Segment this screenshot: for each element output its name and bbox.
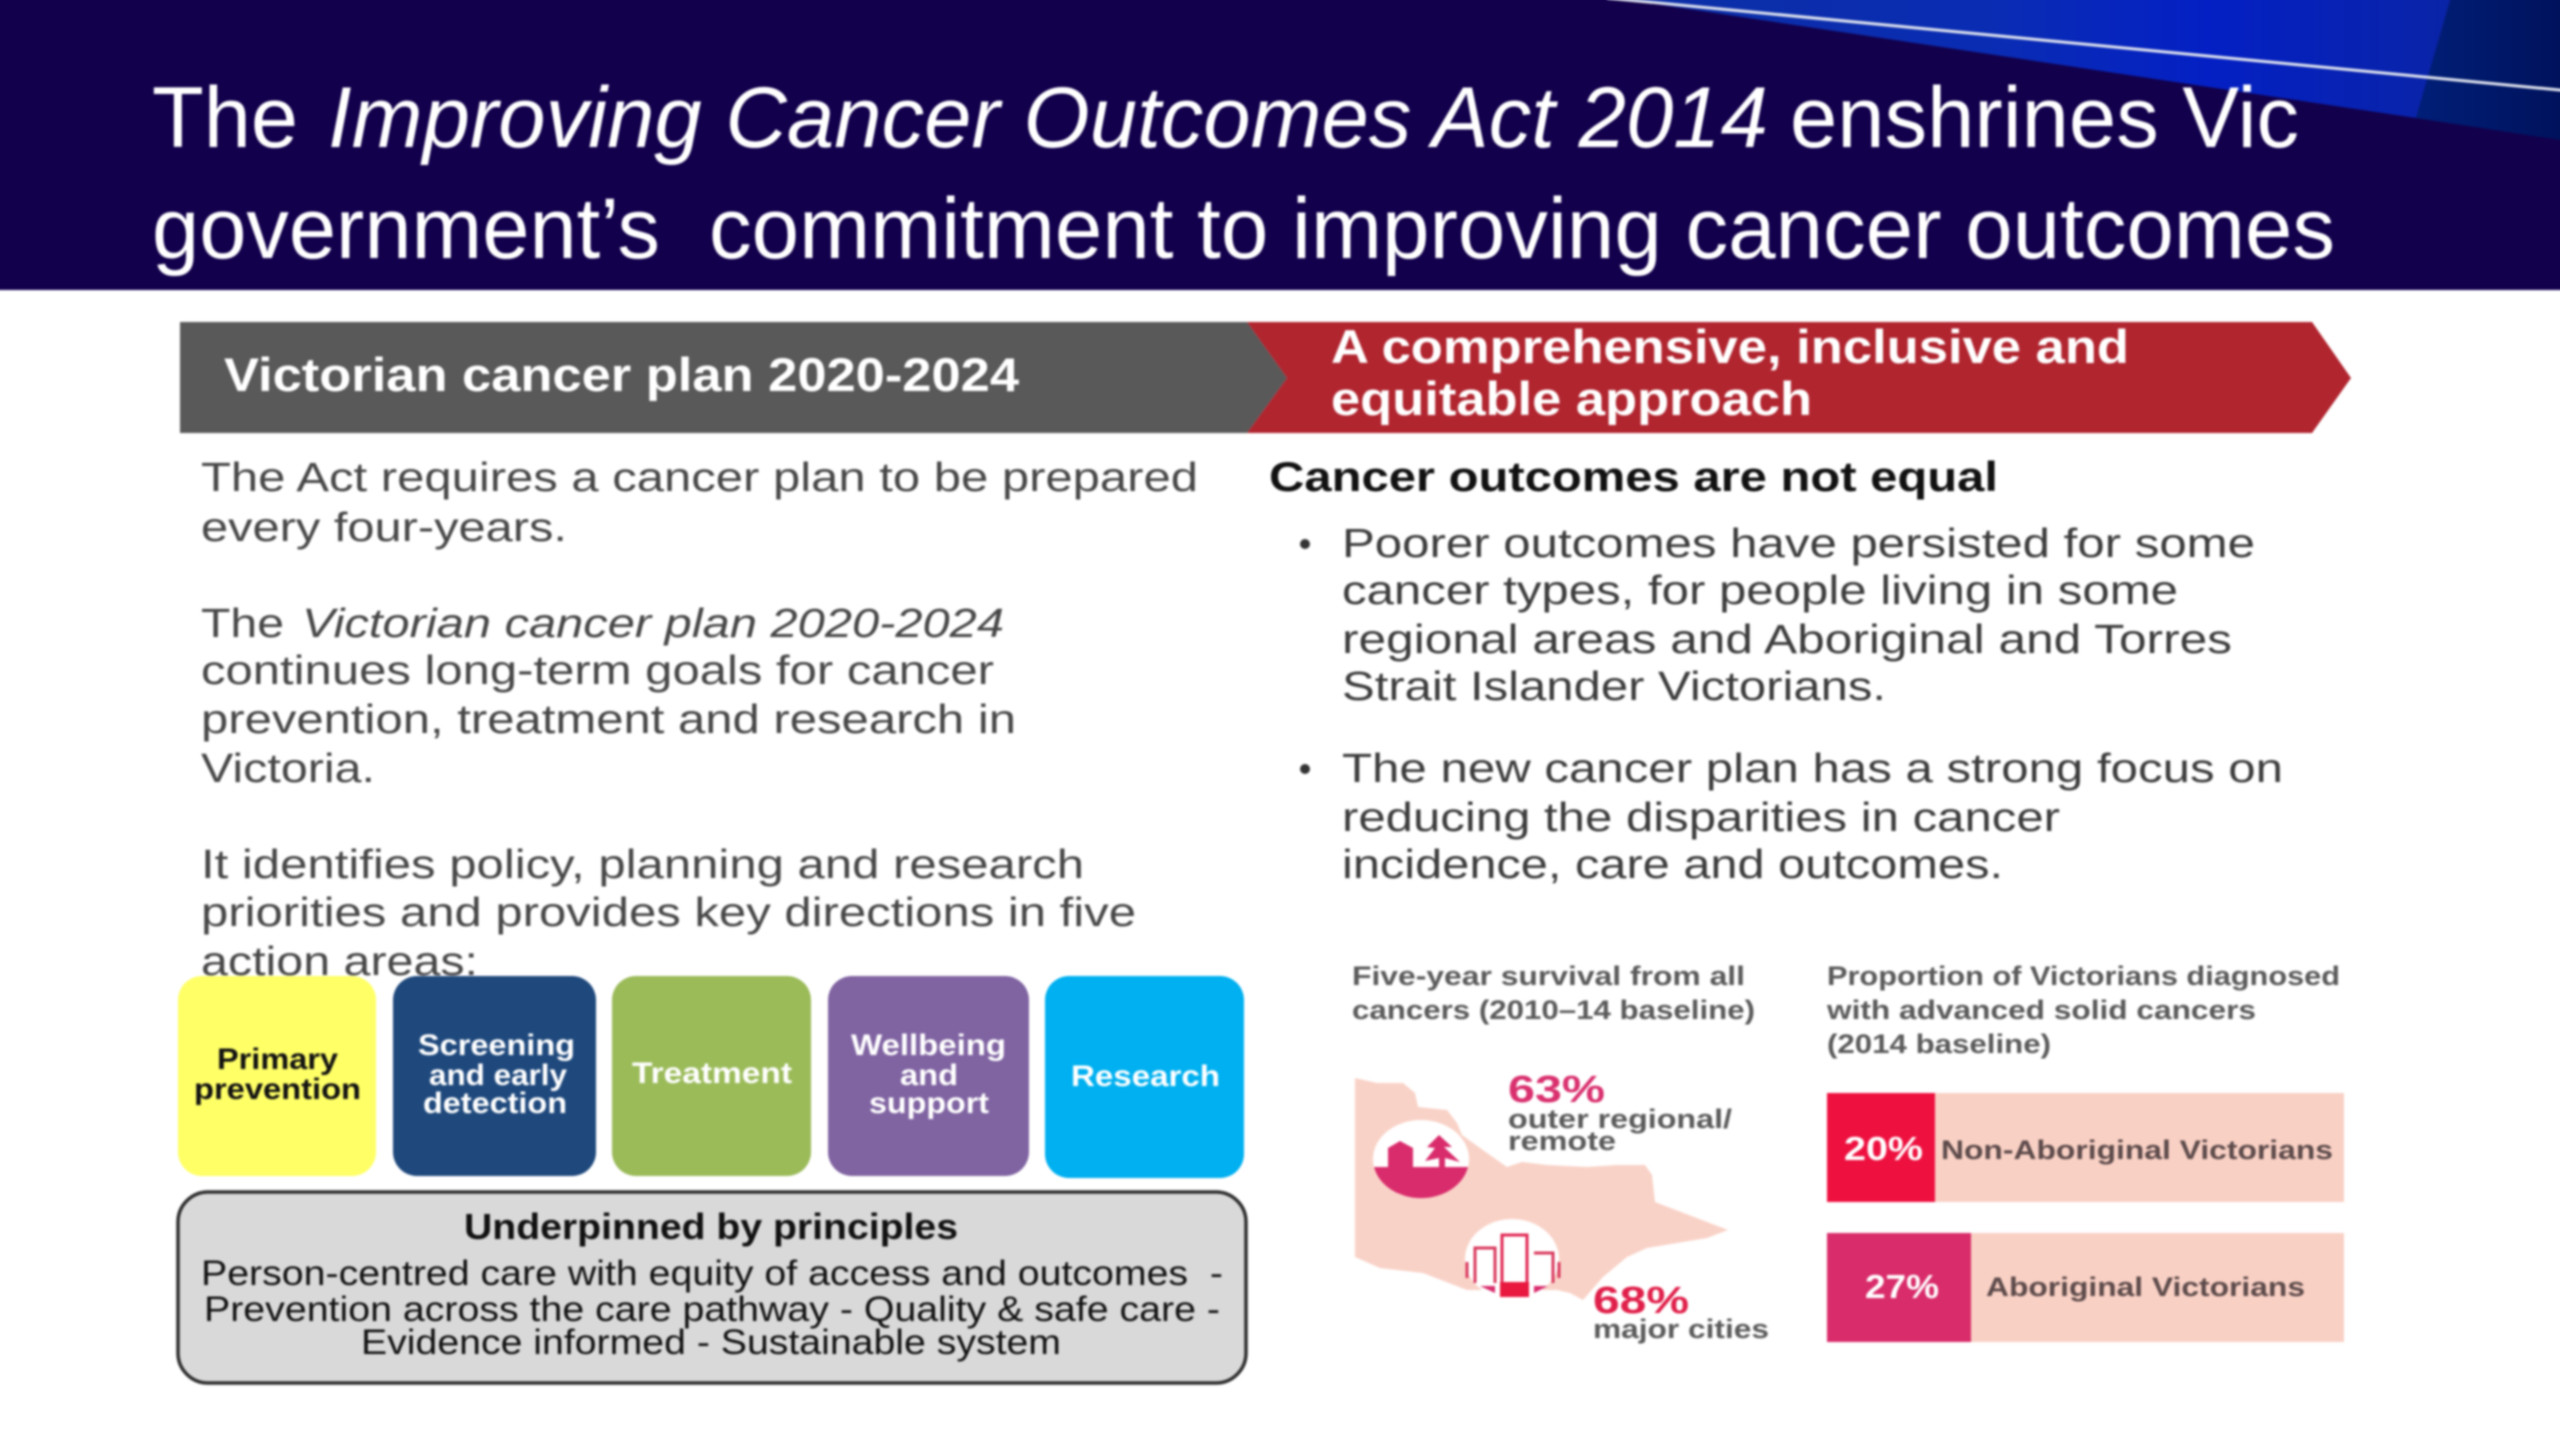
bar: Aboriginal Victorians 27 percent (1827, 1233, 2344, 1342)
principles panel: Evidence informed - Sustainable system (361, 1323, 1061, 1362)
principles panel: Person-centred care with equity of access and outcomes - (201, 1254, 1223, 1293)
decorative blue corner shape (1607, 0, 2560, 143)
principles panel (178, 1192, 1246, 1383)
chart heading: proportion diagnosed: Proportion of Victorians diagnosed (1827, 961, 2340, 991)
chart heading: five-year survival (1352, 961, 1755, 1025)
tile: research: Research (1071, 1060, 1220, 1093)
bullet two: The new cancer plan has a strong focus on (1342, 745, 2283, 791)
bar: non-Aboriginal Victorians 20 percent: Non-Aboriginal Victorians (1941, 1135, 2333, 1165)
tile: treatment: Treatment (632, 1057, 792, 1090)
bullet one: Poorer outcomes have persisted for some (1342, 520, 2255, 566)
grey arrow banner: Victorian cancer plan: Victorian cancer plan 2020-2024 (224, 348, 1019, 401)
left body text: action areas: (201, 938, 478, 984)
bar: Aboriginal Victorians 27 percent: 27% (1865, 1268, 1939, 1305)
stat: 68 percent major cities: major cities (1593, 1314, 1769, 1344)
bullet one: regional areas and Aboriginal and Torres (1342, 616, 2232, 662)
tile: wellbeing: and (900, 1059, 958, 1092)
left body text: priorities and provides key directions in five (201, 889, 1136, 935)
left body text: every four-years. (201, 504, 567, 550)
bar: non-Aboriginal Victorians 20 percent: 20% (1844, 1130, 1923, 1167)
tile: treatment (612, 976, 811, 1176)
chart heading: proportion diagnosed: (2014 baseline) (1827, 1029, 2051, 1059)
header banner (0, 0, 2560, 290)
grey arrow banner: Victorian cancer plan (180, 322, 1287, 433)
bullet one (1300, 520, 2255, 709)
tile: screening: detection (423, 1087, 567, 1120)
stat: 68 percent major cities: 68% (1593, 1280, 1689, 1322)
left body text: Victorian cancer plan 2020-2024 (302, 600, 1004, 646)
tile: wellbeing: support (869, 1087, 989, 1120)
bullet two (1300, 745, 2283, 887)
survival map chart (1352, 961, 1769, 1344)
tile: primary prevention (178, 976, 376, 1176)
stat: 63 percent outer regional (1508, 1069, 1733, 1156)
title: government’s (152, 181, 660, 277)
tile: primary prevention: Primary (217, 1043, 338, 1076)
action area tiles (178, 976, 1244, 1178)
tile: screening: Screening (418, 1029, 575, 1062)
stat: 63 percent outer regional: 63% (1508, 1069, 1605, 1111)
icon: regional house and tree (1373, 1120, 1469, 1198)
title (152, 70, 2335, 277)
red arrow banner: comprehensive approach: A comprehensive, inclusive and (1331, 320, 2129, 373)
tile: research (1045, 976, 1244, 1178)
left body text: Victoria. (201, 745, 375, 791)
stat: 68 percent major cities (1593, 1280, 1769, 1344)
bar: Aboriginal Victorians 27 percent: Aboriginal Victorians (1986, 1272, 2305, 1302)
title: enshrines Vic (1790, 70, 2299, 166)
stat: 63 percent outer regional: remote (1508, 1126, 1616, 1156)
chart heading: proportion diagnosed (1826, 961, 2340, 1059)
left body text: prevention, treatment and research in (201, 696, 1016, 742)
title: Improving Cancer Outcomes Act 2014 (328, 70, 1768, 166)
red arrow banner: comprehensive approach: equitable approach (1331, 372, 1812, 425)
bullet one: Strait Islander Victorians. (1342, 663, 1886, 709)
principles panel: Prevention across the care pathway - Quality & safe care - (204, 1290, 1220, 1329)
bullet one: cancer types, for people living in some (1342, 567, 2178, 613)
chart heading: five-year survival: cancers (2010–14 baseline) (1352, 995, 1755, 1025)
tile: screening: and early (429, 1059, 567, 1092)
left body text: The Act requires a cancer plan to be prepared (201, 454, 1198, 500)
left body text: The (201, 600, 284, 646)
right body text (1269, 453, 2283, 887)
chart heading: proportion diagnosed: with advanced solid cancers (1826, 995, 2256, 1025)
left body text: It identifies policy, planning and research (201, 841, 1084, 887)
tile: wellbeing: Wellbeing (851, 1029, 1006, 1062)
subheading: cancer outcomes: Cancer outcomes are not equal (1269, 453, 1998, 500)
red arrow banner: comprehensive approach (1247, 320, 2351, 433)
left body text: continues long-term goals for cancer (201, 647, 994, 693)
icon: city buildings (1465, 1219, 1559, 1299)
chart heading: five-year survival: Five-year survival from all (1352, 961, 1745, 991)
advanced cancers bar chart (1826, 961, 2344, 1342)
title: commitment to improving cancer outcomes (709, 181, 2335, 277)
stat: 63 percent outer regional: outer regional/ (1508, 1104, 1733, 1134)
tile: primary prevention: prevention (194, 1073, 361, 1106)
left body text (201, 454, 1198, 984)
tile: screening (393, 976, 596, 1176)
bullet two: incidence, care and outcomes. (1342, 841, 2003, 887)
principles panel: Underpinned by principles (464, 1206, 958, 1247)
map of Victoria (1355, 1078, 1728, 1300)
bullet two: reducing the disparities in cancer (1342, 794, 2060, 840)
title: The (152, 70, 298, 166)
bar: non-Aboriginal Victorians 20 percent (1827, 1093, 2344, 1202)
tile: wellbeing (828, 976, 1029, 1176)
